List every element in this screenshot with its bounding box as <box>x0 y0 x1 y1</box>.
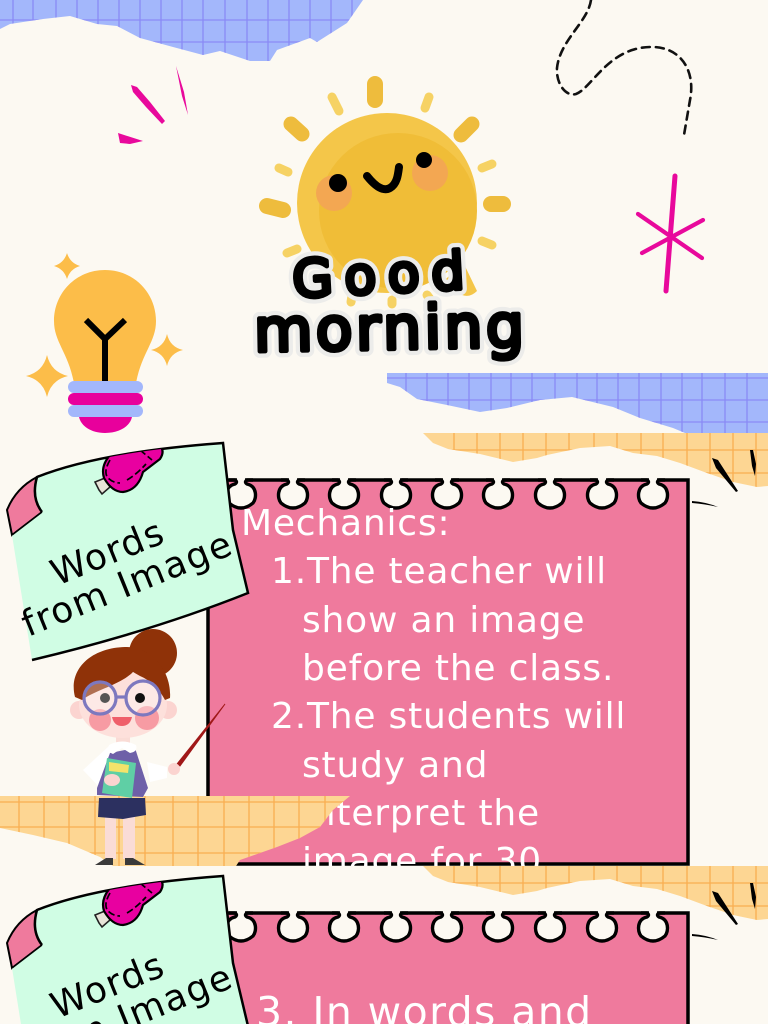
lightbulb icon <box>26 253 183 433</box>
mechanics text <box>241 503 626 882</box>
pink asterisk star <box>638 176 703 291</box>
title: Good Morning: morning <box>253 292 525 366</box>
teacher character <box>70 629 225 865</box>
note card with pin <box>7 440 248 660</box>
page 2: mechanics panel <box>0 433 768 882</box>
card heading: Words <box>45 512 171 594</box>
mechanics text: interpret the <box>302 793 540 834</box>
mechanics text: Mechanics: <box>241 503 450 544</box>
torn orange grid paper, top right <box>420 433 768 507</box>
mechanics text: before the class. <box>302 648 614 689</box>
title: Good Morning: Good <box>291 242 466 310</box>
mechanics text: 2.The students will <box>271 696 626 737</box>
pink notebook panel <box>208 910 688 1024</box>
page 1: greeting panel <box>0 0 768 433</box>
pink notebook panel <box>208 477 688 864</box>
title: Good Morning: morning <box>253 292 525 366</box>
card heading: from Image <box>16 523 239 645</box>
torn blue grid paper, middle right <box>385 373 768 433</box>
mechanics text: show an image <box>302 600 585 641</box>
mechanics text: image for 30 <box>302 841 542 882</box>
sun illustration <box>267 84 503 304</box>
dashed curve, top right <box>557 0 691 135</box>
page 3: second panel, cropped <box>7 866 768 1024</box>
mechanics text: study and <box>302 745 488 786</box>
title: Good Morning: Good <box>291 242 466 310</box>
note card with pin <box>7 873 248 1024</box>
mechanics text: 1.The teacher will <box>271 551 607 592</box>
title: Good Morning <box>253 242 525 366</box>
torn orange grid paper, bottom left <box>0 796 352 866</box>
torn blue grid paper, top left <box>0 0 370 65</box>
torn orange grid paper, top right <box>420 866 768 940</box>
pink accent marks, top left <box>118 66 188 144</box>
